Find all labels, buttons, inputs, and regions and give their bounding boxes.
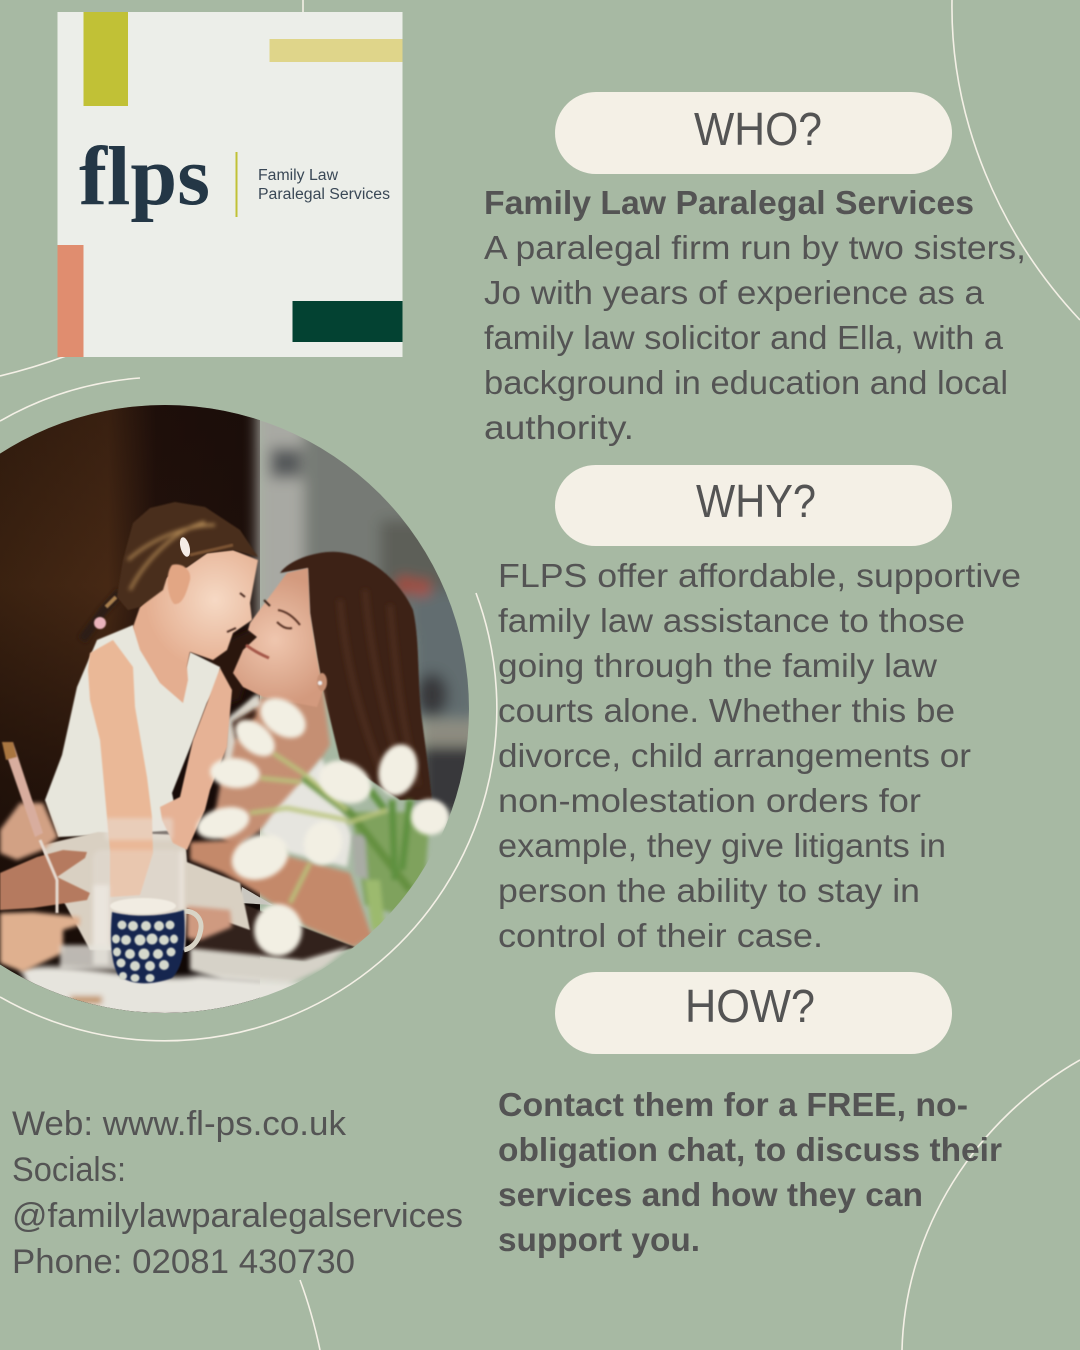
photo: mother and daughter in a circle — [0, 400, 484, 1020]
logo block: sand — [270, 39, 402, 62]
text: how body: Contact them for a FREE, no- — [498, 1086, 968, 1123]
logo tagline — [258, 167, 390, 203]
text: who body: Jo with years of experience as a — [484, 274, 985, 311]
polka dot jug — [110, 898, 201, 983]
photo background wall — [258, 405, 484, 816]
neck and chest — [212, 690, 330, 850]
hands on the left — [0, 803, 90, 972]
braid — [82, 592, 120, 640]
facial features — [246, 600, 327, 691]
lace skirt — [42, 832, 250, 950]
logo wordmark: flps — [79, 130, 210, 223]
pink bobble — [94, 617, 106, 629]
text: who body: Family Law Paralegal Services — [484, 184, 974, 221]
section: who — [484, 92, 1026, 446]
mother — [190, 552, 432, 947]
child — [42, 502, 258, 950]
section: how — [498, 972, 1002, 1258]
text: how body: support you. — [498, 1221, 700, 1258]
tulips — [193, 690, 449, 956]
pill: how: HOW? — [685, 980, 815, 1032]
face — [233, 568, 323, 707]
text: why body: control of their case. — [498, 917, 823, 954]
ear — [168, 564, 190, 604]
text: why body: person the ability to stay in — [498, 872, 920, 909]
straw or pen — [2, 742, 57, 913]
hair — [117, 502, 258, 610]
table and tray — [190, 887, 355, 985]
pill: why — [555, 465, 952, 546]
tulip stems and leaves — [250, 753, 430, 930]
text: why body: family law assistance to those — [498, 602, 965, 639]
child eye and mouth — [227, 593, 245, 632]
pill: who — [555, 92, 952, 174]
logo block: coral — [58, 245, 84, 357]
pill: how — [555, 972, 952, 1054]
text: who body: family law solicitor and Ella, with a — [484, 319, 1004, 356]
pale chair behind the mother — [225, 692, 260, 770]
text: contact details — [12, 1105, 463, 1281]
near arm — [88, 640, 153, 897]
text: how body: obligation chat, to discuss their — [498, 1131, 1002, 1168]
logo tagline: Paralegal Services — [258, 186, 390, 203]
text: who body — [484, 184, 1026, 446]
foot — [187, 906, 232, 940]
text: contact details: Web: www.fl-ps.co.uk — [12, 1105, 347, 1143]
text: why body — [498, 557, 1021, 954]
logo panel — [58, 12, 402, 357]
text: who body: background in education and local — [484, 364, 1008, 401]
text: why body: divorce, child arrangements or — [498, 737, 971, 774]
text: who body: A paralegal firm run by two sisters, — [484, 229, 1026, 266]
white top — [260, 758, 352, 867]
text: why body: non-molestation orders for — [498, 782, 921, 819]
glass jar — [60, 818, 184, 970]
logo block: olive — [84, 12, 128, 106]
hair clip — [180, 537, 190, 557]
far arm and hand — [160, 668, 232, 850]
pill: who: WHO? — [694, 103, 822, 155]
pill: why: WHY? — [696, 475, 816, 527]
text: why body: going through the family law — [498, 647, 937, 684]
cloth — [20, 966, 330, 1018]
arm — [190, 840, 372, 947]
logo block: dark green — [292, 301, 402, 342]
text: why body: courts alone. Whether this be — [498, 692, 955, 729]
neck and face — [133, 550, 258, 703]
logo divider — [236, 152, 238, 217]
text: why body: example, they give litigants in — [498, 827, 946, 864]
dress — [45, 625, 220, 837]
text: contact details: @familylawparalegalservices — [12, 1197, 463, 1235]
text: how body — [498, 1086, 1002, 1258]
logo tagline: Family Law — [258, 167, 339, 184]
hair — [280, 552, 432, 800]
gap between the faces — [208, 633, 256, 703]
section: why — [498, 465, 1021, 954]
text: why body: FLPS offer affordable, supportive — [498, 557, 1021, 594]
text: contact details: Phone: 02081 430730 — [12, 1243, 355, 1281]
text: who body: authority. — [484, 409, 634, 446]
text: how body: services and how they can — [498, 1176, 923, 1213]
text: contact details: Socials: — [12, 1151, 126, 1189]
